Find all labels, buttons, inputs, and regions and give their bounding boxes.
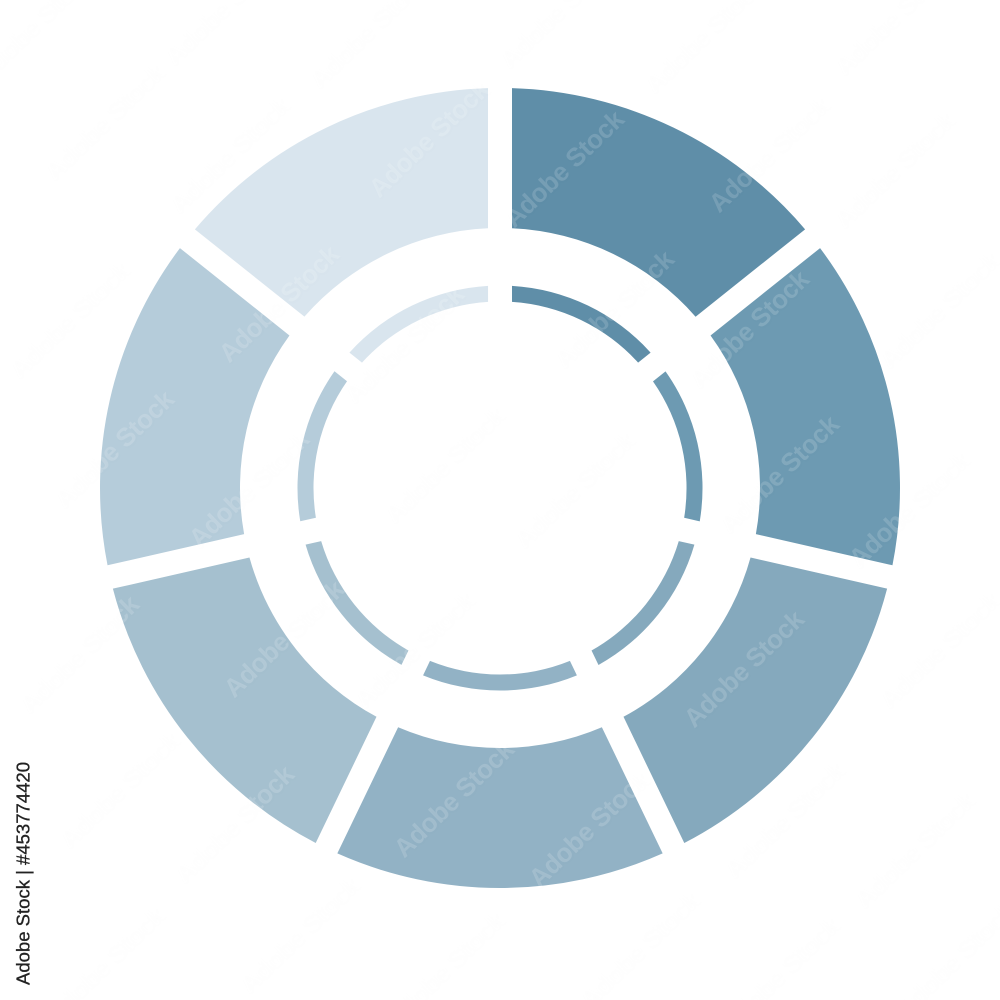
- watermark pattern: Adobe Stock: [13, 589, 145, 718]
- watermark pattern: Adobe Stock: [183, 424, 315, 553]
- watermark pattern: Adobe Stock: [843, 444, 975, 573]
- watermark pattern: Adobe Stock: [38, 56, 170, 185]
- watermark pattern: Adobe Stock: [678, 604, 810, 733]
- watermark pattern: Adobe Stock: [48, 384, 180, 513]
- watermark pattern: Adobe Stock: [168, 759, 300, 888]
- watermark pattern: Adobe Stock: [388, 734, 520, 863]
- segment 1: [512, 88, 805, 317]
- watermark pattern: Adobe Stock: [523, 764, 655, 893]
- watermark pattern: Adobe Stock: [53, 724, 185, 853]
- vertical credit text: Adobe Stock | #453774420: [14, 762, 34, 985]
- watermark pattern: Adobe Stock: [348, 584, 480, 713]
- watermark pattern: Adobe Stock: [233, 869, 365, 998]
- watermark pattern: Adobe Stock: [683, 264, 815, 393]
- thin arc 3: [589, 528, 694, 680]
- watermark pattern: Adobe Stock: [363, 74, 495, 203]
- watermark pattern: Adobe Stock: [163, 89, 295, 218]
- segment 4: [299, 648, 663, 981]
- thin arc 1: [512, 286, 651, 363]
- segment 6: [42, 229, 330, 565]
- thin arc 5: [277, 536, 435, 665]
- segment 5: [52, 510, 415, 843]
- inner thin segmented ring: [269, 244, 752, 735]
- watermark pattern: Adobe Stock: [498, 104, 630, 233]
- watermark pattern: Adobe Stock: [848, 784, 980, 913]
- watermark pattern: Adobe Stock: [338, 279, 470, 408]
- watermark pattern: Adobe Stock: [218, 574, 350, 703]
- watermark pattern: Adobe Stock: [508, 424, 640, 553]
- watermark pattern: Adobe Stock: [378, 399, 510, 528]
- segment 2: [641, 248, 1000, 620]
- thin arc 7: [349, 244, 496, 400]
- watermark pattern: Adobe Stock: [213, 239, 345, 368]
- watermark pattern: Adobe Stock: [718, 754, 850, 883]
- thin arc 6: [269, 369, 375, 521]
- watermark pattern: Adobe Stock: [703, 89, 835, 218]
- watermark pattern: Adobe Stock: [713, 409, 845, 538]
- segment 7: [195, 0, 556, 372]
- thin arc 2: [606, 371, 752, 528]
- watermark pattern: Adobe Stock: [828, 104, 960, 233]
- segment 3: [599, 538, 887, 874]
- watermark pattern: Adobe Stock: [548, 244, 680, 373]
- watermark pattern: Adobe Stock: [3, 254, 135, 383]
- thin arc 4: [419, 606, 577, 735]
